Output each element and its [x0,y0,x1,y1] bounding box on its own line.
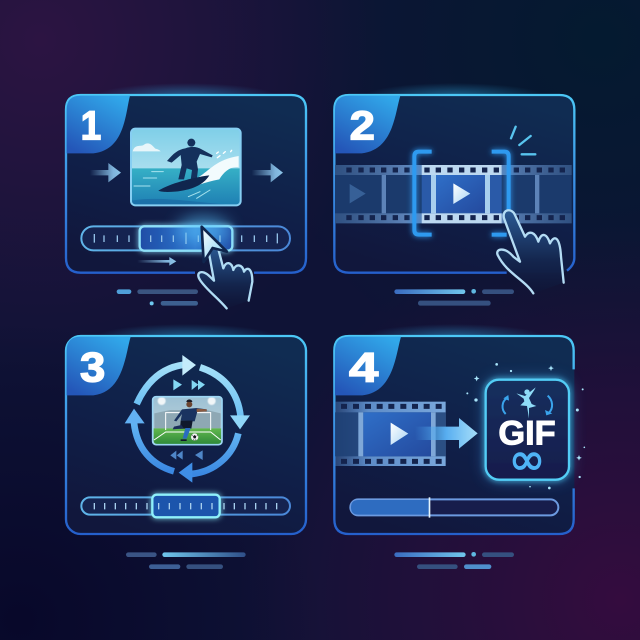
soccer photo [153,397,222,445]
icon: play [391,423,408,445]
caption placeholder lines [117,289,198,306]
panel: step 2 select frames [334,95,574,306]
footballer [173,399,207,441]
playback icons top [173,379,205,390]
selected frames [422,165,502,223]
sparkles [466,363,585,489]
badge: number 2: 2 [350,102,375,148]
caption placeholder lines [394,552,514,569]
arrow: scrub direction [137,257,176,266]
caption placeholder lines [126,552,246,569]
icon: dancer [516,387,536,419]
trim brackets [414,152,509,235]
arrow: outgoing [252,163,283,182]
panel 2 frame [334,95,574,273]
film strip [335,402,446,466]
GIF card [486,380,569,486]
icon: dim play [350,184,366,203]
ball [191,433,198,441]
selected range [152,495,220,517]
arrow: incoming [90,163,121,182]
badge: number 3: 3 [80,345,105,391]
icon: play [453,183,470,204]
badge: number 4: 4 [349,345,378,391]
playback icons bottom [170,450,203,460]
badge: number 1 [67,96,130,153]
cursor and hand [177,217,252,308]
badge: number 2 [335,96,400,153]
GIF label: GIF [498,414,556,452]
spark marks [511,127,535,154]
infinity symbol: ∞ [508,434,546,486]
panel: step 1 trim start [66,95,306,308]
panel 4 frame [334,336,574,534]
panel 1 frame [66,95,306,273]
arrow: convert [415,418,478,449]
progress bar [350,497,558,518]
scrubber timeline [81,495,290,517]
panel 3 frame [66,336,306,534]
panel: step 4 export GIF [334,336,585,569]
loop arrows [125,355,250,483]
panel: step 3 loop [66,336,306,569]
caption placeholder lines [394,289,514,306]
badge: number 4 [335,337,401,395]
surfer photo [131,129,241,205]
scrubber timeline [81,226,290,251]
hand [497,210,564,293]
badge: number 3 [67,337,131,395]
film strip [335,165,572,223]
badge: number 1: 1 [81,102,101,148]
icon: rotate arrows [503,395,552,415]
selected range [140,226,232,251]
